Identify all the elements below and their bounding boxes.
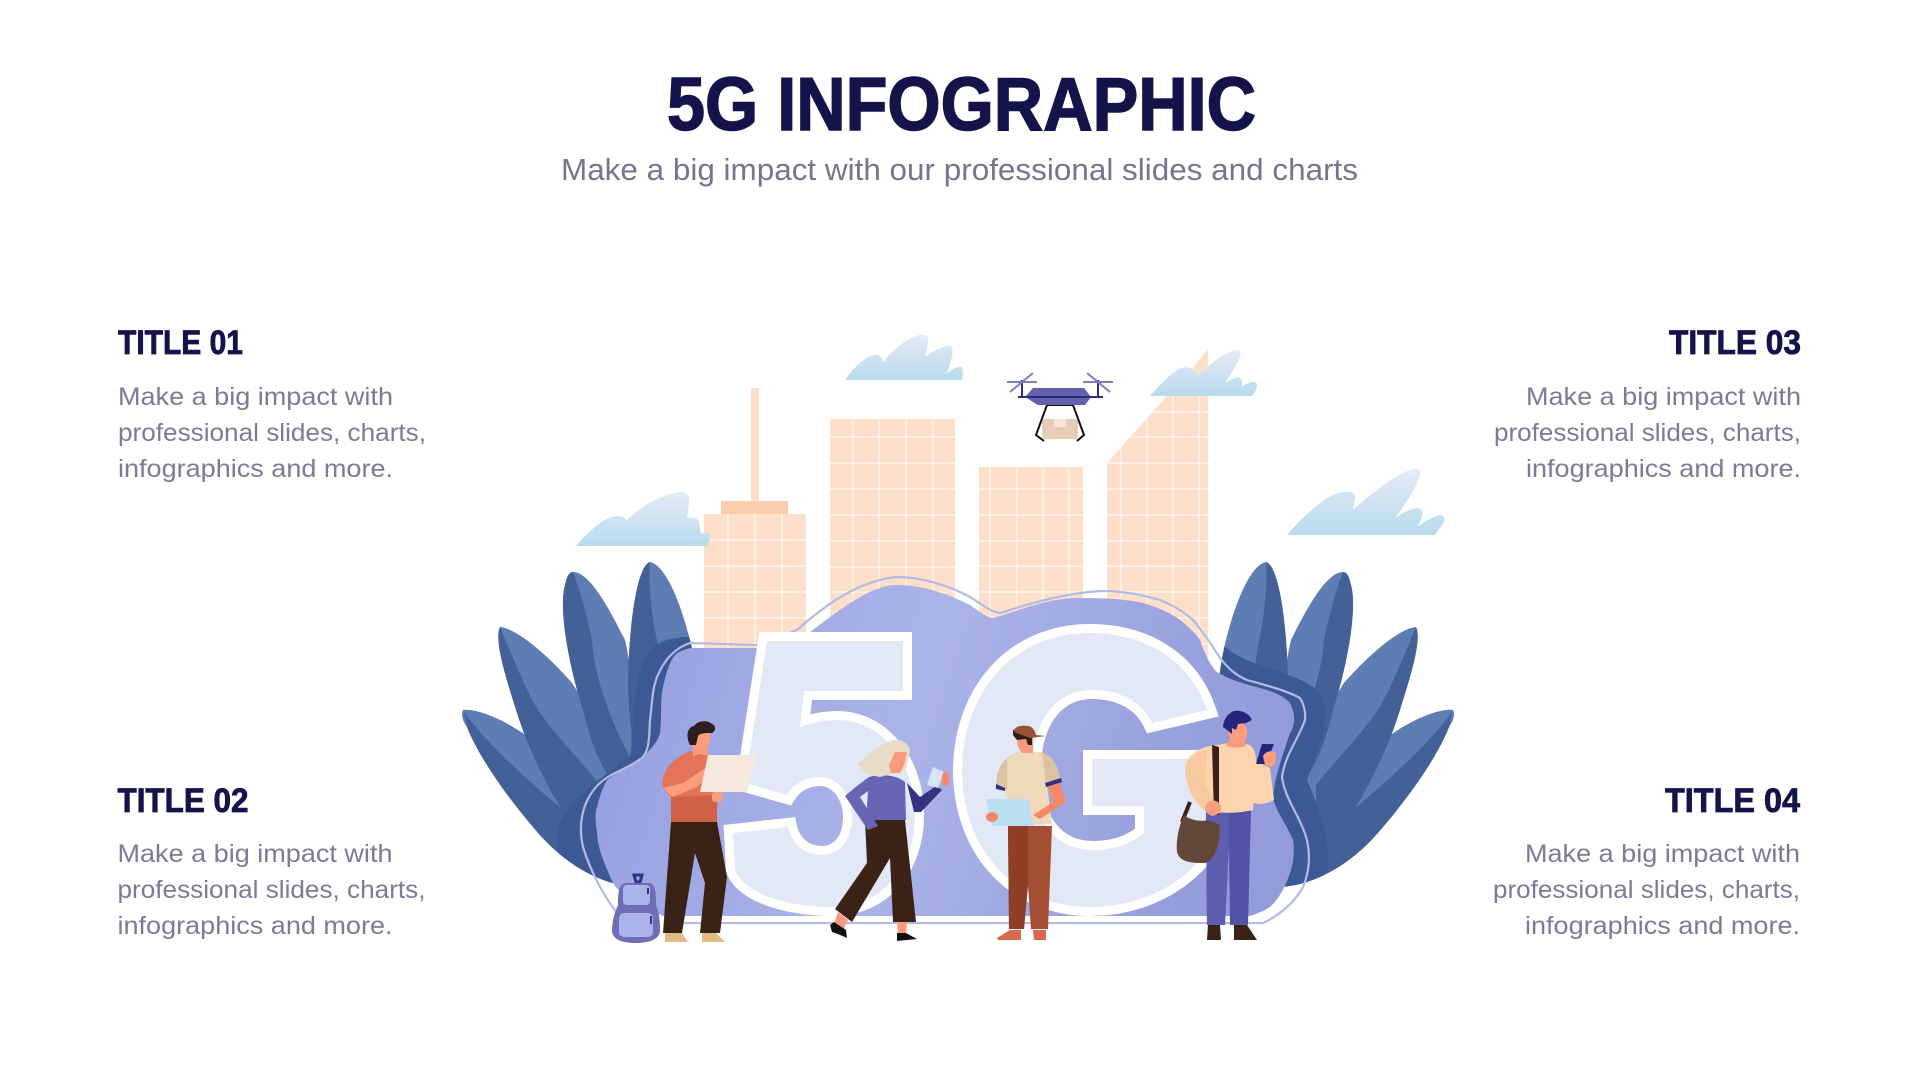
paper xyxy=(927,767,944,788)
text block: title 02: Make a big impact with xyxy=(118,840,392,868)
letter G xyxy=(962,633,1212,907)
leaf shadow right xyxy=(1220,646,1328,887)
text block: title 03: infographics and more. xyxy=(1526,455,1801,483)
map xyxy=(986,799,1034,826)
buildings xyxy=(704,350,1208,680)
shoes xyxy=(665,933,725,942)
heels xyxy=(830,922,917,941)
text block: title 01: infographics and more. xyxy=(118,455,393,483)
building: antenna tower xyxy=(704,388,806,660)
text block: title 03: professional slides, charts, xyxy=(1494,419,1801,447)
text block: title 03: TITLE 03 xyxy=(1669,324,1801,362)
text block: title 04: infographics and more. xyxy=(1525,912,1800,940)
hair and sunglasses xyxy=(1013,730,1032,745)
plant: right leaves xyxy=(1196,562,1454,900)
arm xyxy=(1033,783,1066,819)
text block: title 04: TITLE 04 xyxy=(1665,782,1800,820)
blob outline xyxy=(581,577,1309,923)
person: man with clipboard xyxy=(663,721,757,942)
strap xyxy=(1212,745,1219,815)
building roof sliver xyxy=(1197,350,1208,375)
neck and head xyxy=(1226,738,1246,748)
clouds xyxy=(576,335,1445,546)
text block: title 02: professional slides, charts, xyxy=(118,876,426,904)
text block: title 03 xyxy=(1494,324,1801,483)
icon: drone with parcel xyxy=(1007,373,1113,441)
cap xyxy=(1014,726,1046,738)
top xyxy=(866,775,906,820)
text block: title 04: professional slides, charts, xyxy=(1493,876,1800,904)
text block: title 01: Make a big impact with xyxy=(118,383,393,411)
shirt xyxy=(996,752,1060,824)
text block: title 02: infographics and more. xyxy=(118,912,392,940)
neck and head xyxy=(693,745,708,756)
building: short grid block xyxy=(979,467,1083,627)
cloud: top right xyxy=(1150,350,1257,396)
shoes xyxy=(997,930,1046,940)
trousers xyxy=(1008,826,1052,929)
shirt xyxy=(663,751,717,822)
parcel xyxy=(1042,419,1078,439)
ankles xyxy=(834,912,907,936)
trousers xyxy=(1206,811,1251,925)
title: 5G INFOGRAPHIC xyxy=(667,62,1256,146)
text block: title 02: TITLE 02 xyxy=(118,782,248,820)
person: man with phone and satchel xyxy=(1177,711,1276,940)
leaf shadow left xyxy=(558,637,692,884)
hair xyxy=(858,740,910,777)
satchel xyxy=(1177,815,1220,863)
arm xyxy=(663,767,715,797)
hair xyxy=(687,721,715,745)
trousers xyxy=(663,822,727,933)
building: tall grid block xyxy=(830,419,955,629)
hand on strap xyxy=(1205,800,1221,816)
background blob xyxy=(596,585,1294,916)
cloud: top middle xyxy=(845,335,963,380)
clipboard xyxy=(700,755,757,792)
person: man with cap and map xyxy=(986,726,1066,940)
face xyxy=(889,752,907,773)
sweater xyxy=(1185,743,1256,813)
left arm xyxy=(845,777,878,830)
cloud: right xyxy=(1287,469,1445,535)
hair xyxy=(1223,711,1252,734)
shoes xyxy=(1207,925,1257,940)
building: slanted roof block xyxy=(1107,350,1208,680)
infographic canvas xyxy=(117,76,1800,943)
right arm xyxy=(907,783,942,812)
text block: title 04 xyxy=(1493,782,1800,940)
plant: left leaves xyxy=(462,562,720,900)
blob bottom mask xyxy=(700,916,1260,922)
trousers xyxy=(835,820,916,922)
text block: title 04: Make a big impact with xyxy=(1525,840,1800,868)
digit 5 xyxy=(733,641,915,907)
text block: title 02 xyxy=(118,782,426,940)
person: woman with paper xyxy=(830,740,949,941)
cuffs xyxy=(996,778,1062,791)
text block: title 01: professional slides, charts, xyxy=(118,419,426,447)
subtitle: Make a big impact with our professional slides and charts xyxy=(561,152,1358,187)
text block: title 01: TITLE 01 xyxy=(118,324,243,362)
text block: title 03: Make a big impact with xyxy=(1526,383,1801,411)
head xyxy=(1017,733,1033,753)
phone xyxy=(1256,744,1274,764)
text block: title 01 xyxy=(118,324,426,483)
icon: backpack xyxy=(612,875,660,943)
cloud: left xyxy=(576,492,710,546)
